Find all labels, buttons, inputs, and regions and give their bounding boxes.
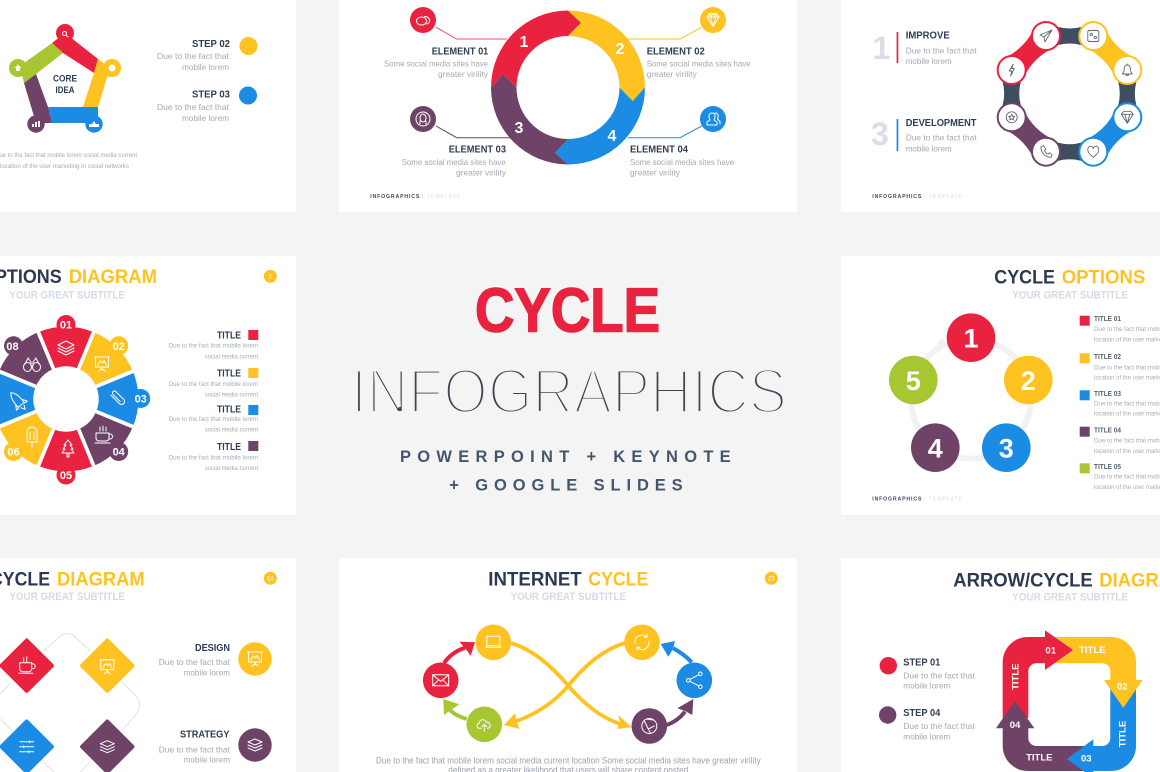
development block: [871, 116, 977, 153]
caption: location of the user marketing in social networks: [0, 163, 129, 170]
infinity loop diagram: [423, 624, 712, 744]
step 01: [880, 657, 975, 691]
caption: [0, 152, 137, 170]
legend 03: TITLE 03: [1094, 389, 1121, 398]
footer label: |: [422, 194, 423, 200]
step 01: Due to the fact that: [903, 670, 975, 680]
eight segment wheel: 02: [113, 341, 125, 353]
page badge: [765, 572, 778, 585]
five step ring: 5: [906, 366, 921, 396]
improve block: [872, 30, 977, 66]
step 02: [157, 37, 258, 72]
ring with four arrow segments: 2: [616, 41, 625, 58]
five step ring: 2: [1021, 366, 1036, 396]
step 02: mobile lorem: [182, 62, 229, 72]
slide title: YOUR GREAT SUBTITLE: [9, 289, 125, 301]
slide title: [0, 266, 157, 301]
step 01: mobile lorem: [903, 681, 950, 691]
title row 2: social media current: [205, 391, 258, 398]
title row 4: Due to the fact that mobile lorem: [169, 454, 258, 461]
eight segment wheel: 05: [60, 470, 72, 482]
title row 1: TITLE: [217, 329, 241, 341]
slide title: CYCLE: [994, 266, 1055, 288]
design item: DESIGN: [195, 642, 230, 654]
slide title: [0, 569, 145, 603]
page badge: [264, 572, 277, 585]
square arrow cycle: TITLE: [1010, 664, 1021, 690]
five step ring: 1: [963, 324, 979, 354]
element 02: ELEMENT 02: [647, 46, 705, 58]
step 04: [879, 706, 975, 741]
step 01: STEP 01: [903, 657, 940, 669]
step 04: mobile lorem: [903, 731, 950, 741]
step 03: STEP 03: [192, 88, 230, 100]
square arrow cycle: 03: [1081, 753, 1092, 764]
subheading line 2: + GOOGLE SLIDES: [449, 477, 683, 495]
step 04: STEP 04: [903, 707, 940, 719]
improve block: mobile lorem: [906, 56, 952, 66]
step 02: Due to the fact that: [157, 51, 230, 61]
footer label: |: [924, 497, 925, 503]
element 02: greater virility: [647, 69, 697, 79]
slide title: CYCLE: [588, 569, 648, 591]
panel: core idea pentagon: [0, 0, 296, 212]
slide title: YOUR GREAT SUBTITLE: [511, 591, 626, 603]
slide title: OPTIONS: [1062, 266, 1145, 288]
element 03: greater virility: [456, 168, 507, 178]
strategy item: mobile lorem: [184, 755, 230, 765]
text: core idea: [53, 74, 77, 96]
leader lines and element icons: [410, 7, 726, 138]
step 03: [157, 86, 257, 123]
title row 4: TITLE: [217, 441, 241, 453]
diamond cycle: [0, 634, 140, 772]
footer label: INFOGRAPHICS: [872, 194, 922, 200]
square arrow cycle: TITLE: [1079, 645, 1105, 656]
step 04: Due to the fact that: [903, 721, 975, 731]
legend 04: [1080, 425, 1160, 455]
development block: 3: [871, 116, 889, 152]
caption: Due to the fact that mobile lorem social media current location Some social media sites have greater virility: [376, 755, 761, 765]
slide title: YOUR GREAT SUBTITLE: [9, 591, 125, 603]
five step ring: 4: [928, 434, 943, 464]
square arrow cycle: 02: [1117, 681, 1128, 692]
element 01: ELEMENT 01: [432, 46, 488, 58]
title row 3: TITLE: [217, 404, 241, 416]
eight segment wheel: 04: [113, 446, 126, 458]
footer label: TEMPLATE: [427, 194, 461, 200]
eight segment wheel: 08: [6, 341, 19, 353]
title row 1: social media current: [205, 353, 258, 360]
element 01: [384, 46, 489, 79]
legend 05: [1080, 462, 1160, 491]
element 04: Some social media sites have: [630, 157, 734, 167]
slide title: YOUR GREAT SUBTITLE: [1012, 592, 1128, 604]
title row 4: [169, 441, 258, 472]
panel: chain cycle: [841, 0, 1160, 212]
design item: mobile lorem: [184, 668, 230, 678]
slide title: [994, 266, 1145, 301]
slide title: [488, 569, 648, 603]
element 03: Some social media sites have: [402, 157, 506, 167]
square arrow cycle: TITLE: [1026, 752, 1052, 763]
eight segment wheel: 01: [60, 320, 72, 332]
legend 02: TITLE 02: [1094, 352, 1121, 361]
footer label: [872, 497, 963, 503]
title row 3: Due to the fact that mobile lorem: [169, 416, 258, 423]
square arrow cycle: TITLE: [1118, 721, 1129, 747]
central cover title: [351, 277, 787, 495]
text: core idea: CORE: [53, 74, 77, 84]
development block: DEVELOPMENT: [906, 117, 977, 129]
title row 3: [169, 404, 258, 434]
panel: arrow cycle diagram: [841, 558, 1160, 772]
panel: cycle options: [841, 256, 1160, 515]
title row 1: [169, 329, 258, 360]
page badge: 23: [768, 576, 775, 582]
chain links diagram: [998, 22, 1141, 166]
step 02: STEP 02: [192, 38, 230, 50]
element 04: [630, 144, 734, 178]
slide title: ARROW/CYCLE: [953, 570, 1093, 592]
legend 01: TITLE 01: [1094, 314, 1121, 323]
footer label: |: [924, 194, 925, 200]
strategy item: STRATEGY: [180, 729, 230, 741]
legend 04: TITLE 04: [1094, 425, 1122, 434]
footer label: INFOGRAPHICS: [872, 497, 922, 503]
slide title: [953, 570, 1160, 604]
element 02: Some social media sites have: [647, 58, 751, 68]
subheading line 1: POWERPOINT + KEYNOTE: [400, 448, 731, 466]
title row 2: Due to the fact that mobile lorem: [169, 381, 258, 388]
title row 1: Due to the fact that mobile lorem: [169, 343, 258, 350]
element 01: Some social media sites have: [384, 58, 488, 68]
panel: internet cycle: [339, 558, 797, 772]
footer label: TEMPLATE: [929, 497, 963, 503]
footer label: INFOGRAPHICS: [370, 194, 420, 200]
slide title: INTERNET: [488, 569, 582, 591]
ring with four arrow segments: 4: [608, 128, 617, 145]
title row 2: TITLE: [217, 368, 241, 380]
title row 3: social media current: [205, 427, 258, 434]
legend 03: [1080, 389, 1160, 418]
legend 05: TITLE 05: [1094, 462, 1121, 471]
slide title: DIAGRAM: [69, 266, 157, 288]
panel: four element ring: [339, 0, 797, 212]
square arrow cycle: [996, 630, 1143, 772]
element 04: ELEMENT 04: [630, 144, 688, 156]
panel: options diagram: [0, 256, 296, 515]
development block: Due to the fact that: [906, 133, 977, 143]
pentagon cycle diagram: [9, 24, 121, 133]
improve block: IMPROVE: [906, 30, 950, 42]
strategy item: [159, 728, 272, 765]
legend 02: [1080, 352, 1160, 382]
title row 2: [169, 368, 258, 398]
title row 4: social media current: [205, 465, 258, 472]
improve block: Due to the fact that: [906, 46, 977, 56]
element 04: greater virility: [630, 168, 681, 178]
square arrow cycle: 01: [1045, 646, 1057, 656]
five step ring: [889, 313, 1053, 472]
element 03: ELEMENT 03: [449, 144, 506, 156]
page badge: 14: [267, 576, 274, 582]
element 03: [402, 144, 507, 178]
five step ring: 3: [999, 434, 1014, 464]
development block: mobile lorem: [906, 143, 952, 153]
page badge: 5: [269, 274, 273, 280]
design item: Due to the fact that: [159, 657, 231, 667]
eight segment wheel: 03: [135, 394, 147, 406]
heading: cycle: CYCLE: [475, 277, 660, 346]
legend 01: [1080, 314, 1160, 344]
footer label: [370, 194, 461, 200]
square arrow cycle: 04: [1010, 720, 1021, 731]
footer label: TEMPLATE: [929, 194, 963, 200]
heading: infographics: INFOGRAPHICS: [351, 357, 787, 427]
step 03: Due to the fact that: [157, 102, 230, 112]
page badge: [264, 270, 277, 283]
design item: [159, 642, 272, 678]
slide title: DIAGRAM: [57, 569, 145, 591]
text: core idea: IDEA: [56, 85, 75, 96]
improve block: 1: [872, 30, 890, 66]
element 02: [647, 46, 751, 79]
ring with four arrow segments: 1: [520, 34, 529, 51]
step 03: mobile lorem: [182, 113, 229, 123]
strategy item: Due to the fact that: [159, 744, 231, 754]
slide title: YOUR GREAT SUBTITLE: [1012, 289, 1128, 301]
panel: cycle diagram: [0, 558, 296, 772]
eight segment wheel: [0, 315, 150, 484]
footer label: [872, 194, 963, 200]
ring with four arrow segments: [491, 10, 645, 165]
ring with four arrow segments: 3: [515, 120, 524, 137]
caption: [376, 755, 761, 772]
eight segment wheel: 06: [7, 446, 20, 458]
element 01: greater virility: [438, 69, 489, 79]
